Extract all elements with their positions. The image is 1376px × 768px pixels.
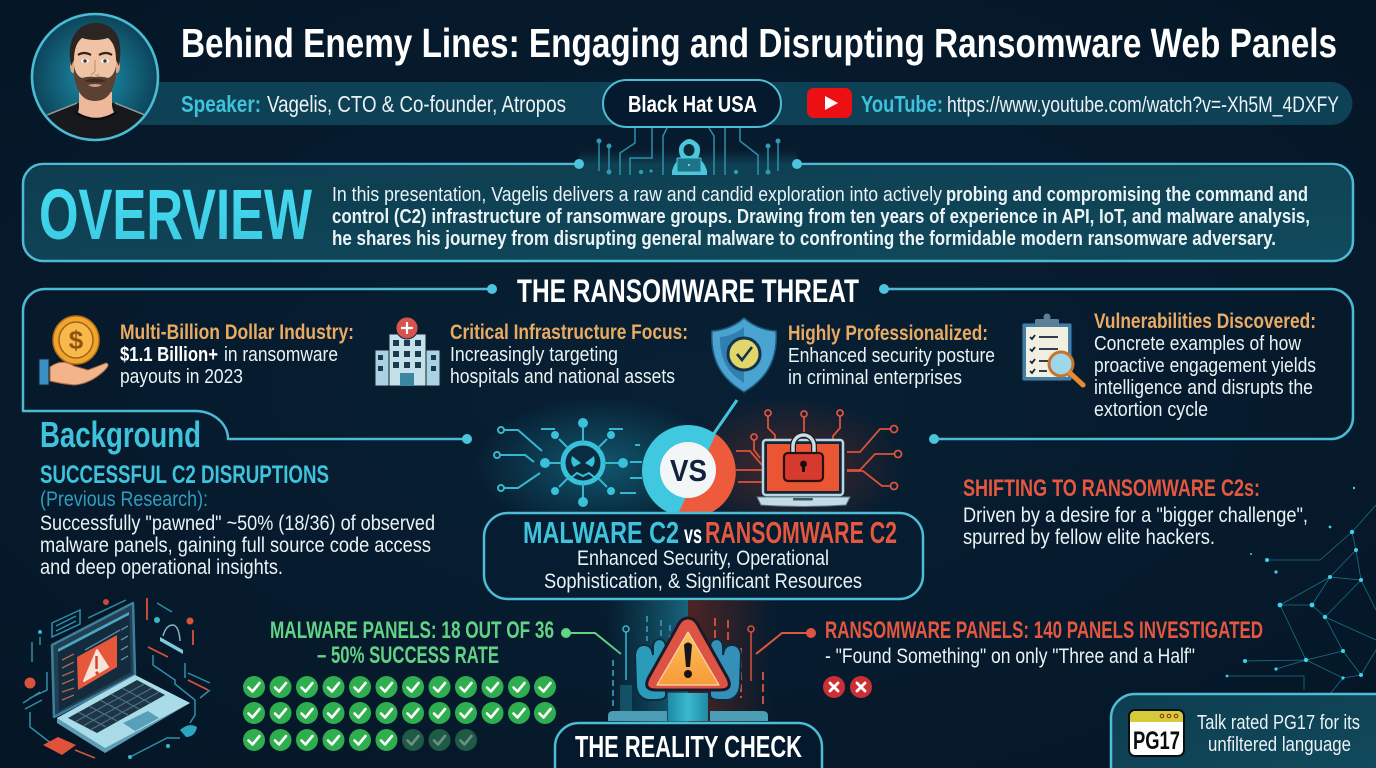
item text [788, 322, 995, 389]
red tile [43, 737, 95, 758]
icon: youtube [807, 88, 852, 118]
background body [40, 512, 435, 579]
item text [1094, 310, 1316, 421]
speaker credit: Vagelis, CTO & Co-founder, Atropos [267, 91, 566, 117]
comparison panel [484, 513, 923, 599]
icon: coin in hand [39, 316, 108, 385]
comparison description: Enhanced Security, Operational [577, 547, 829, 570]
icon: coin in hand: $ [69, 325, 84, 355]
item text: proactive engagement yields [1094, 355, 1316, 377]
item text: Enhanced security posture [788, 345, 995, 367]
item text: extortion cycle [1094, 399, 1208, 421]
item text: $1.1 Billion+ [120, 344, 218, 366]
speaker ribbon [140, 82, 1352, 125]
shifting to ransomware callout: Driven by a desire for a "bigger challenge", [963, 504, 1308, 527]
item text: payouts in 2023 [120, 366, 243, 388]
background body: Successfully "pawned" ~50% (18/36) of observed [40, 512, 435, 535]
background body: malware panels, gaining full source code access [40, 534, 431, 557]
reality check panel: THE REALITY CHECK [575, 729, 802, 764]
comparison description: Sophistication, & Significant Resources [544, 570, 862, 593]
event badge: Black Hat USA [628, 91, 757, 117]
comparison heading: vs [684, 519, 702, 549]
reality check panel [555, 723, 822, 768]
icon: malware virus [494, 418, 642, 507]
threat item: vulnerabilities discovered [1022, 310, 1316, 421]
threat item: multi-billion industry [39, 316, 354, 388]
icon: hospital [375, 317, 440, 386]
rating panel [1111, 694, 1376, 768]
malware panels statistic: MALWARE PANELS: 18 OUT OF 36 [270, 617, 554, 644]
vs badge: VS [670, 453, 707, 488]
success check grid [243, 676, 556, 751]
circuit decoration [23, 598, 210, 759]
comparison heading [523, 515, 897, 550]
item text: intelligence and disrupts the [1094, 377, 1313, 399]
comparison description [544, 547, 862, 593]
overview paragraph: probing and compromising the command and [946, 184, 1308, 206]
laptop body [52, 603, 190, 753]
threat item: highly professionalized [712, 318, 995, 392]
overview panel [23, 150, 1353, 261]
icon: clipboard with magnifier [1022, 314, 1083, 385]
item text: in criminal enterprises [788, 367, 962, 389]
icon: pg17 badge: PG17 [1133, 727, 1180, 755]
threat heading: THE RANSOMWARE THREAT [517, 273, 859, 309]
speaker portrait [30, 13, 160, 145]
item text: Vulnerabilities Discovered: [1094, 310, 1316, 333]
background heading: Background [40, 414, 201, 455]
rating note: unfiltered language [1208, 734, 1351, 756]
item text: Multi-Billion Dollar Industry: [120, 321, 354, 344]
comparison heading: MALWARE C2 [523, 515, 679, 550]
icon: pg17 badge [1129, 710, 1184, 756]
ransomware panels statistic [825, 617, 1263, 668]
malware panels statistic: – 50% SUCCESS RATE [317, 642, 499, 669]
shifting to ransomware callout: spurred by fellow elite hackers. [963, 526, 1215, 549]
item text [450, 321, 688, 388]
failure marks [823, 676, 872, 698]
icon: warning with hands [606, 600, 772, 723]
shifting to ransomware callout [963, 475, 1308, 549]
ransomware panels statistic: - "Found Something" on only "Three and a Half" [825, 645, 1195, 668]
event badge [603, 80, 781, 127]
background body: and deep operational insights. [40, 556, 283, 579]
threat item: critical infrastructure [375, 317, 688, 388]
rating note [1197, 712, 1360, 756]
overview heading: OVERVIEW [39, 176, 312, 255]
item text [120, 321, 354, 388]
comparison heading: RANSOMWARE C2 [705, 515, 897, 550]
item text: in ransomware [224, 344, 338, 366]
speaker credit: Speaker: [181, 91, 261, 117]
malware panels statistic [270, 617, 554, 669]
decorative network graphic [1226, 487, 1376, 694]
item text: hospitals and national assets [450, 366, 675, 388]
icon: hacker circuit [596, 128, 780, 175]
overview paragraph: In this presentation, Vagelis delivers a raw and candid exploration into actively [332, 184, 942, 206]
green connector [561, 628, 621, 654]
vs badge [642, 400, 737, 518]
icon: shield [712, 318, 776, 392]
overview paragraph [332, 184, 1310, 250]
ransomware connector [756, 628, 816, 654]
item text: Critical Infrastructure Focus: [450, 321, 688, 344]
item text: Highly Professionalized: [788, 322, 988, 345]
shifting to ransomware callout: SHIFTING TO RANSOMWARE C2s: [963, 475, 1260, 502]
icon: ransomware laptop [736, 410, 902, 506]
item text: Increasingly targeting [450, 344, 618, 366]
previous research note: (Previous Research): [40, 488, 208, 511]
speaker credit [181, 91, 566, 117]
subheading: SUCCESSFUL C2 DISRUPTIONS [40, 461, 329, 489]
youtube link: YouTube: [861, 91, 943, 117]
threat section frame [23, 284, 1353, 444]
background section [40, 414, 435, 579]
item text: Concrete examples of how [1094, 333, 1301, 355]
icon: compromised laptop [23, 598, 210, 759]
comparison glow [475, 397, 905, 533]
